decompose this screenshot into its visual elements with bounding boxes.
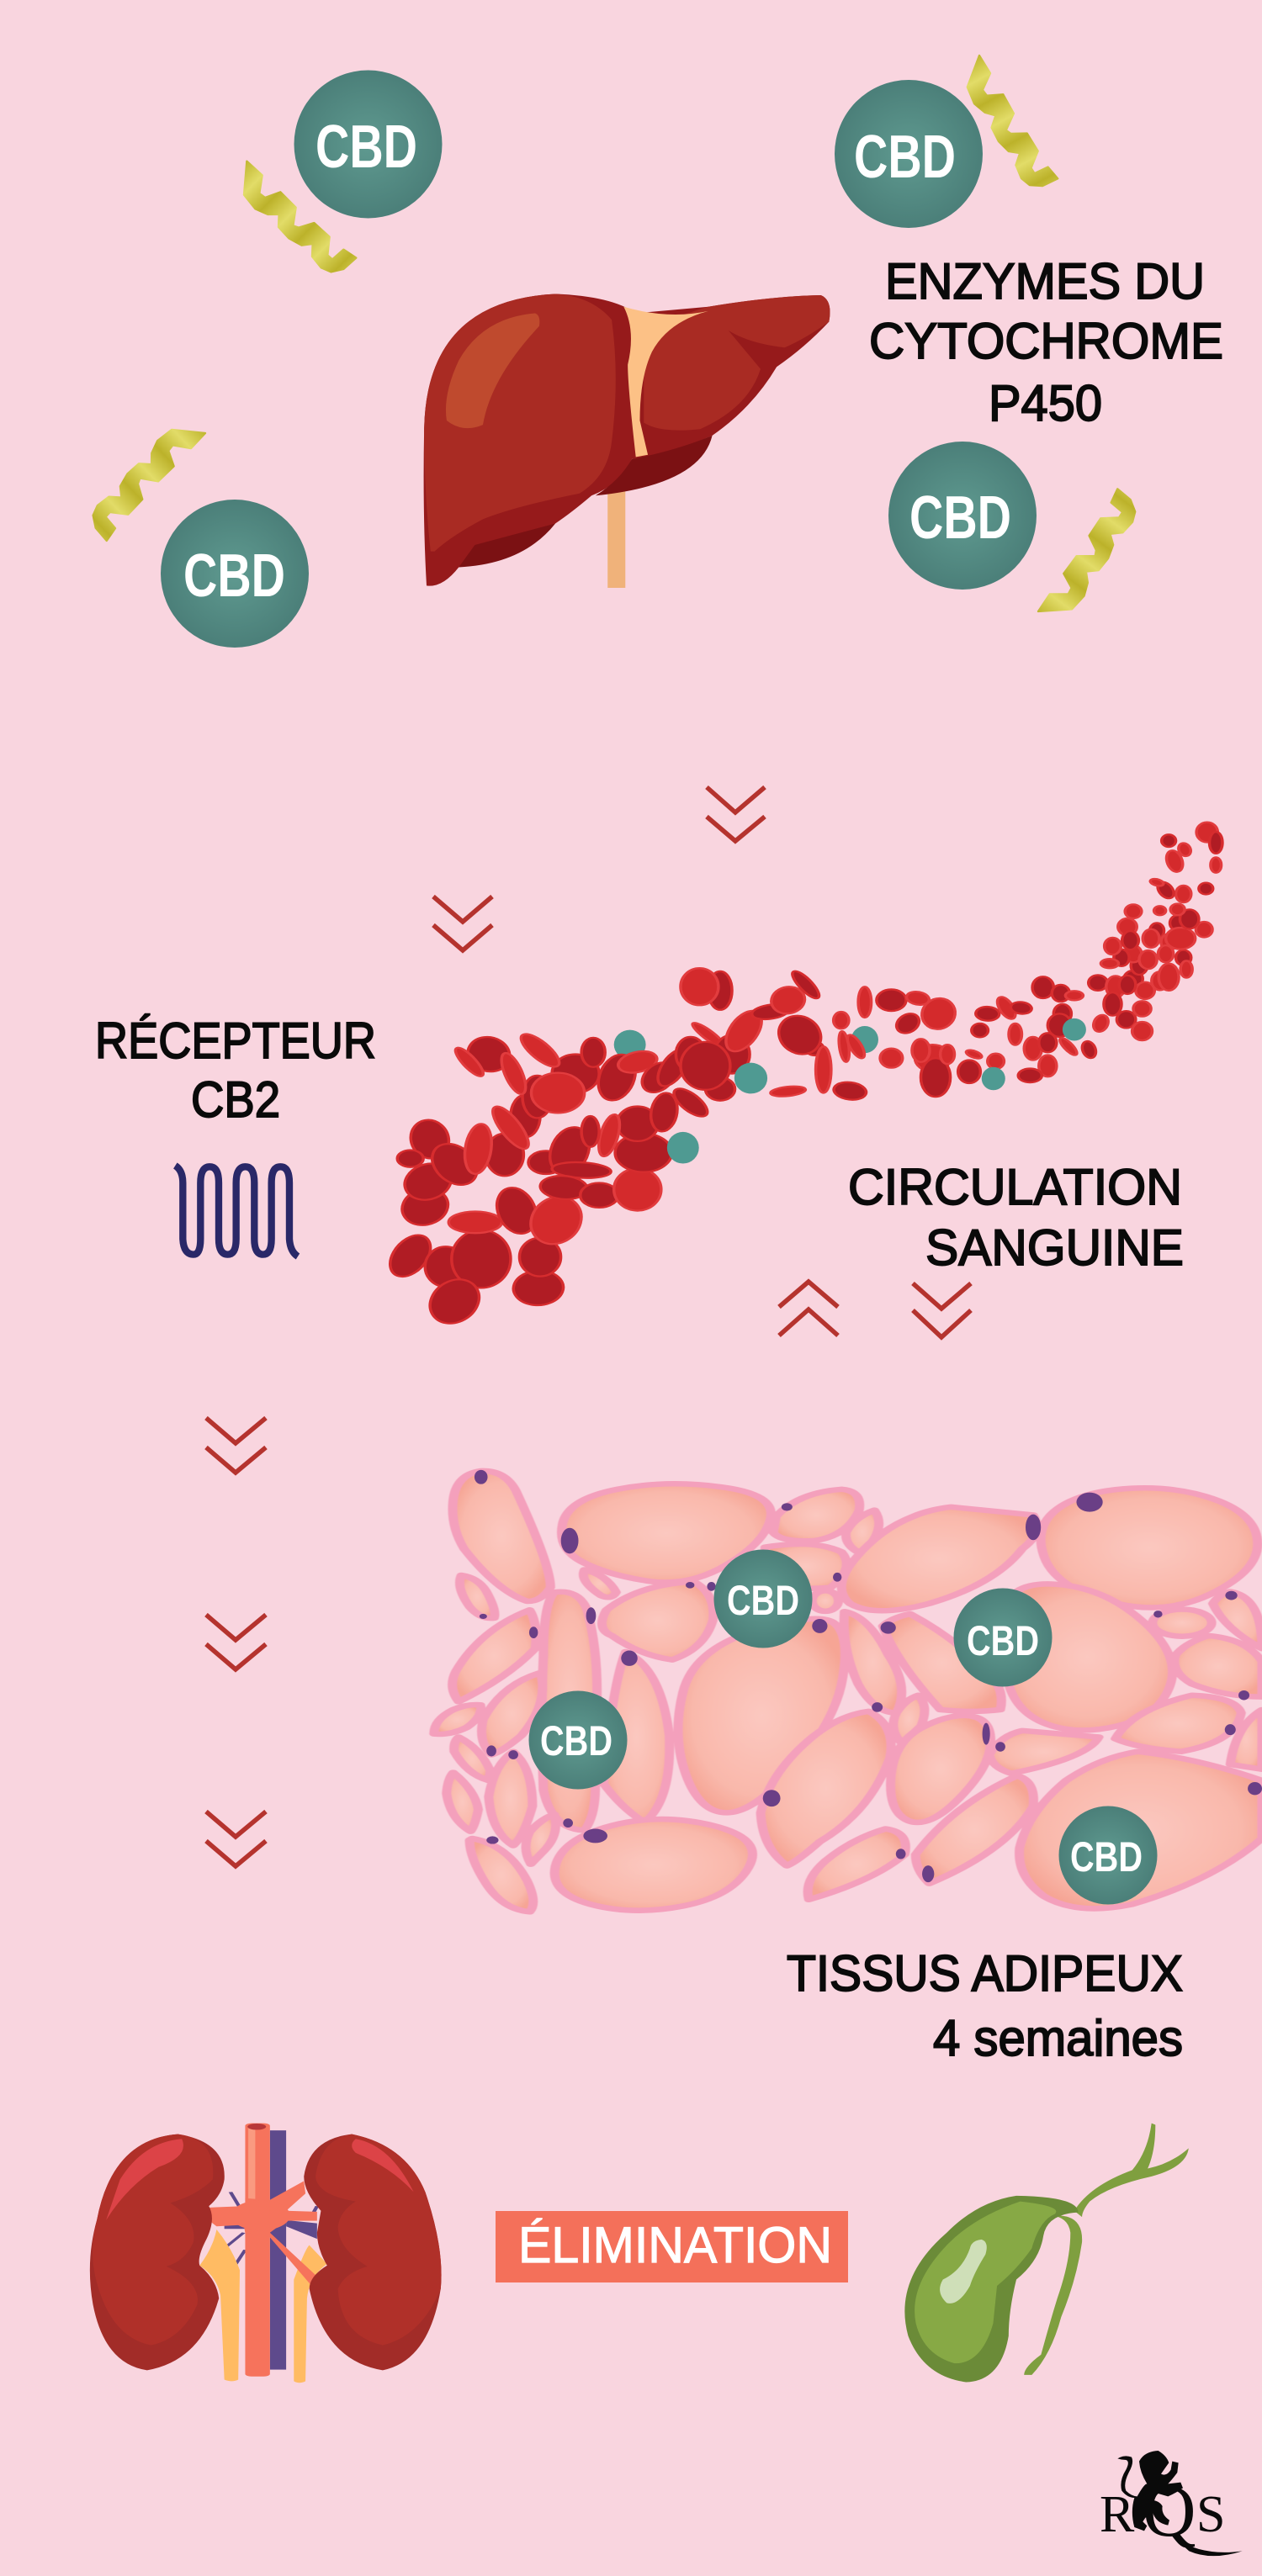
CBD molecule left: CBD <box>183 542 285 610</box>
title: enzymes du cytochrome P450: CYTOCHROME <box>869 313 1223 369</box>
cell nuclei <box>475 1470 1262 1882</box>
ribbon top left <box>244 161 356 272</box>
chart: blood stream with red cells <box>382 823 1222 1327</box>
ribbon top right <box>946 55 1084 192</box>
ribbon right <box>1022 487 1148 614</box>
label: circulation sanguine: CIRCULATION <box>848 1159 1182 1215</box>
icon: liver <box>424 294 830 588</box>
logo: RQS lion: Q <box>1143 2471 1196 2552</box>
CBD molecule in adipose tissue 2: CBD <box>967 1617 1039 1664</box>
CBD molecule top left <box>294 71 443 219</box>
CBD molecule in adipose tissue 3: CBD <box>540 1717 612 1764</box>
arrow: left column second <box>206 1615 266 1669</box>
icon: kidneys <box>90 2124 442 2383</box>
CBD molecule in adipose tissue 2 <box>954 1588 1052 1687</box>
title: enzymes du cytochrome P450 <box>869 253 1223 431</box>
logo: RQS lion: R <box>1100 2486 1135 2543</box>
arrow: down to blood left <box>433 897 492 950</box>
CBD molecule in adipose tissue 3 <box>528 1690 628 1790</box>
CBD molecule in adipose tissue 4 <box>1058 1806 1158 1904</box>
CBD molecule right: CBD <box>909 484 1011 552</box>
label: tissus adipeux, 4 semaines: TISSUS ADIPEUX <box>787 1945 1183 2002</box>
fat cells <box>434 1471 1262 1912</box>
ribbon left <box>93 428 205 542</box>
CBD molecule in adipose tissue 1: CBD <box>727 1577 799 1624</box>
CBD molecule in adipose tissue 1 <box>713 1549 813 1648</box>
logo: RQS lion <box>1100 2451 1243 2556</box>
CBD molecule top right: CBD <box>854 124 956 191</box>
label: circulation sanguine <box>848 1159 1184 1276</box>
arrow: left column first <box>206 1418 266 1473</box>
icon: gallbladder <box>904 2124 1189 2382</box>
CBD molecule top left: CBD <box>316 114 417 181</box>
arrow: liver to blood <box>707 787 765 841</box>
label: circulation sanguine: SANGUINE <box>925 1219 1184 1276</box>
icon: CB2 receptor serpentine <box>175 1166 298 1256</box>
arrow: down to tissue <box>913 1283 971 1337</box>
label: récepteur CB2: RÉCEPTEUR <box>95 1013 376 1069</box>
small teal CBD dots in front <box>982 1018 1086 1090</box>
CBD molecule left <box>161 500 309 648</box>
teal CBD dots <box>667 1026 878 1164</box>
teal CBD dot behind cells <box>614 1030 646 1060</box>
CBD molecule top right <box>835 80 983 228</box>
arrow: left column third <box>206 1812 266 1866</box>
logo: RQS lion: S <box>1196 2486 1225 2543</box>
CBD molecule right <box>888 442 1037 590</box>
title: enzymes du cytochrome P450: ENZYMES DU <box>885 253 1205 309</box>
label: élimination: ÉLIMINATION <box>518 2217 832 2273</box>
label: tissus adipeux, 4 semaines <box>787 1945 1183 2066</box>
chart: adipose tissue cells <box>434 1470 1262 1912</box>
CBD molecule in adipose tissue 4: CBD <box>1070 1833 1143 1880</box>
label: récepteur CB2 <box>95 1013 376 1128</box>
smaller red cells <box>834 823 1222 1097</box>
label: tissus adipeux, 4 semaines: 4 semaines <box>933 2010 1183 2066</box>
red blood cells <box>382 968 870 1327</box>
label: récepteur CB2: CB2 <box>191 1071 280 1128</box>
title: enzymes du cytochrome P450: P450 <box>989 375 1102 431</box>
arrow: up from tissue <box>779 1282 838 1336</box>
